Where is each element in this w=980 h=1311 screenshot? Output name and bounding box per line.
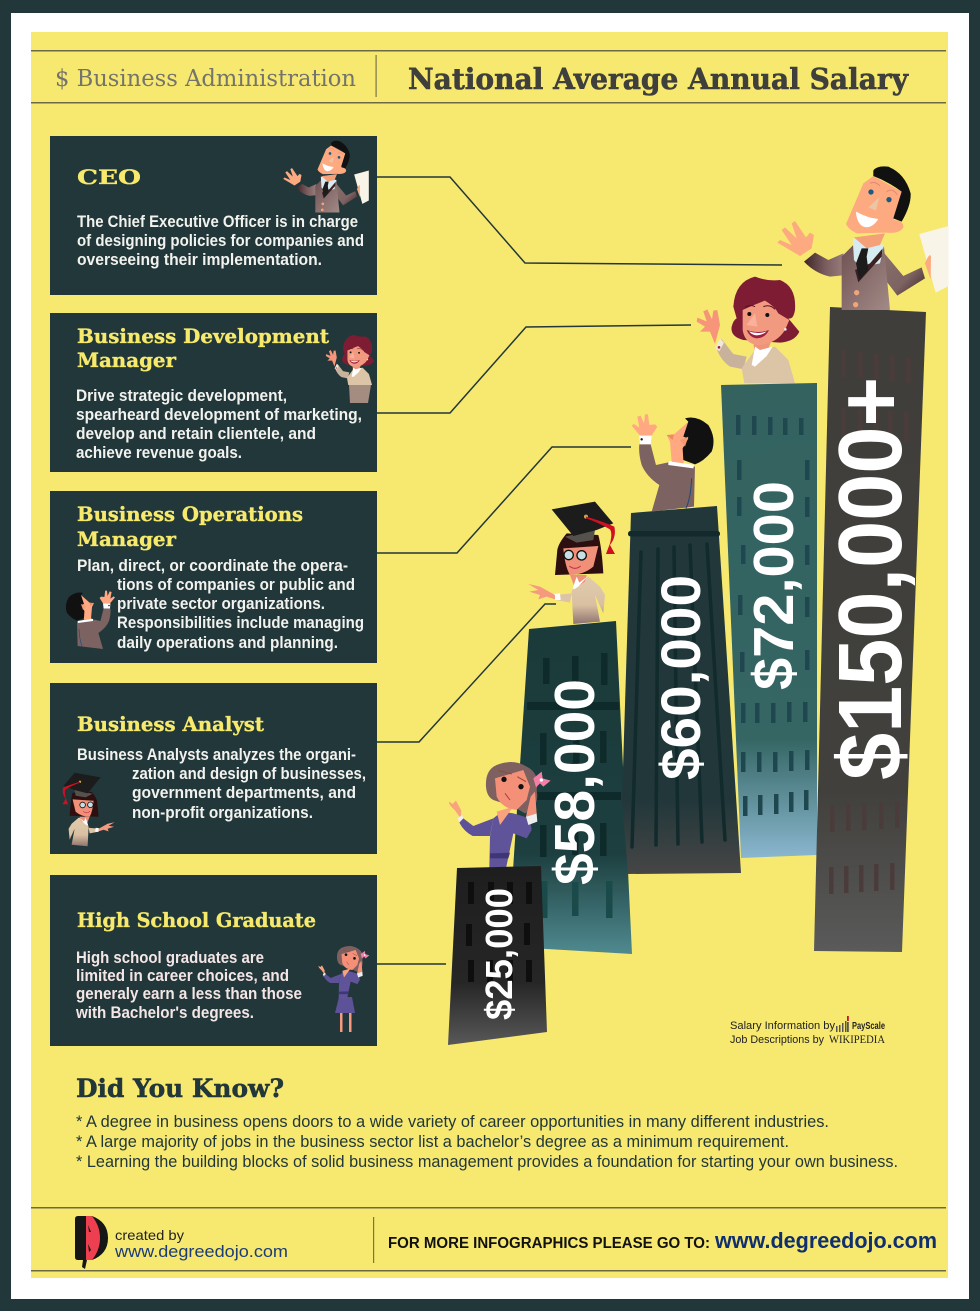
building: $60,000 xyxy=(622,506,741,874)
description: High School Graduate: limited in career choices, and xyxy=(76,967,289,985)
description: Business Operations Manager: Responsibilities include managing xyxy=(117,614,364,632)
description: High School Graduate: High school graduates are xyxy=(76,949,264,967)
heading: CEO: CEO xyxy=(77,165,141,189)
heading: Business Development Manager: Manager xyxy=(77,348,176,372)
source credits: Salary Information by xyxy=(730,1020,836,1032)
description: High School Graduate: generaly earn a less than those xyxy=(76,985,302,1003)
panel: CEO xyxy=(50,136,377,295)
description: Business Operations Manager: tions of companies or public and xyxy=(117,576,355,594)
source credits: PayScale xyxy=(852,1021,885,1032)
icon: DegreeDojo logo xyxy=(75,1216,108,1269)
panel: Business Operations Manager xyxy=(50,491,377,663)
building: $72,000 xyxy=(721,383,817,858)
header band xyxy=(31,50,946,104)
main title: National Average Annual Salary xyxy=(408,62,909,96)
panel: Business Analyst xyxy=(50,683,377,854)
description: Business Analyst xyxy=(77,746,366,822)
icon: man reaching up xyxy=(66,591,115,649)
icon: graduate xyxy=(63,773,115,846)
description: Business Analyst: government departments, and xyxy=(132,784,356,802)
Did You Know facts: * Learning the building blocks of solid business management provides a foundation for starting your own business. xyxy=(76,1153,898,1171)
source credits xyxy=(730,1016,886,1046)
source credits: WIKIPEDIA xyxy=(829,1034,886,1046)
heading: Business Operations Manager: Business Operations xyxy=(77,502,303,526)
panel: Business Development Manager xyxy=(50,313,377,472)
description: CEO xyxy=(77,213,364,269)
icon: high school girl xyxy=(318,946,369,1032)
value label: $72,000 xyxy=(742,481,806,690)
description: Business Development Manager: develop and retain clientele, and xyxy=(76,425,316,443)
heading: Business Analyst: Business Analyst xyxy=(77,712,265,736)
Did You Know facts: * A large majority of jobs in the business sector list a bachelor’s degree as a minimum requirement. xyxy=(76,1133,789,1151)
building: $150,000+ xyxy=(814,307,926,952)
icon: CEO xyxy=(283,141,369,212)
value label: $25,000 xyxy=(479,888,521,1020)
heading: Business Development Manager xyxy=(77,324,330,372)
website large: www.degreedojo.com xyxy=(714,1228,937,1253)
figure: man reaching up, seen from the side xyxy=(632,414,714,512)
description: Business Operations Manager: daily operations and planning. xyxy=(117,634,338,652)
value label: $60,000 xyxy=(649,575,712,780)
heading: Business Operations Manager xyxy=(77,502,303,551)
building: $58,000 xyxy=(513,621,632,954)
Did You Know heading: Did You Know? xyxy=(76,1074,284,1103)
description: High School Graduate: with Bachelor's degrees. xyxy=(75,1004,254,1022)
building: $25,000 xyxy=(448,866,547,1045)
description: Business Development Manager: Drive strategic development, xyxy=(76,387,287,405)
heading: Business Operations Manager: Manager xyxy=(77,527,176,551)
website small: www.degreedojo.com xyxy=(114,1242,288,1261)
value label: $150,000+ xyxy=(821,377,921,780)
Did You Know facts: * A degree in business opens doors to a wide variety of career opportunities in many different industries. xyxy=(76,1113,829,1131)
description: CEO: The Chief Executive Officer is in charge xyxy=(77,213,358,231)
icon: businesswoman xyxy=(326,335,374,403)
description: Business Development Manager xyxy=(76,387,362,462)
icon: PayScale dots xyxy=(836,1016,849,1032)
call to action: FOR MORE INFOGRAPHICS PLEASE GO TO: xyxy=(388,1235,710,1252)
section title: $ Business Administration xyxy=(55,66,356,92)
heading: High School Graduate: High School Graduate xyxy=(77,908,316,932)
description: Business Analyst: non-profit organizations. xyxy=(132,804,313,822)
figure: businesswoman waving xyxy=(697,277,799,383)
value label: $58,000 xyxy=(543,679,607,885)
created by: created by xyxy=(115,1227,184,1243)
panel: High School Graduate xyxy=(50,875,377,1046)
description: Business Development Manager: achieve revenue goals. xyxy=(76,444,242,462)
description: Business Analyst: Business Analysts analyzes the organi- xyxy=(77,746,356,764)
description: CEO: of designing policies for companies and xyxy=(77,232,364,250)
heading: Business Development Manager: Business Development xyxy=(77,324,330,348)
description: Business Operations Manager xyxy=(77,557,364,652)
description: Business Development Manager: spearheard development of marketing, xyxy=(76,406,362,424)
figure: CEO man waving xyxy=(777,166,949,310)
figure: high school graduate girl xyxy=(449,762,551,868)
source credits: Job Descriptions by xyxy=(730,1034,824,1046)
connector lines xyxy=(377,177,782,964)
figure: graduate with cap xyxy=(528,502,615,624)
description: Business Operations Manager: private sector organizations. xyxy=(117,595,325,613)
description: CEO: overseeing their implementation. xyxy=(77,251,322,269)
description: Business Operations Manager: Plan, direct, or coordinate the opera- xyxy=(77,557,348,575)
description: Business Analyst: zation and design of businesses, xyxy=(132,765,366,783)
footer band xyxy=(31,1207,946,1272)
description: High School Graduate xyxy=(75,949,302,1022)
Did You Know facts xyxy=(76,1113,898,1171)
